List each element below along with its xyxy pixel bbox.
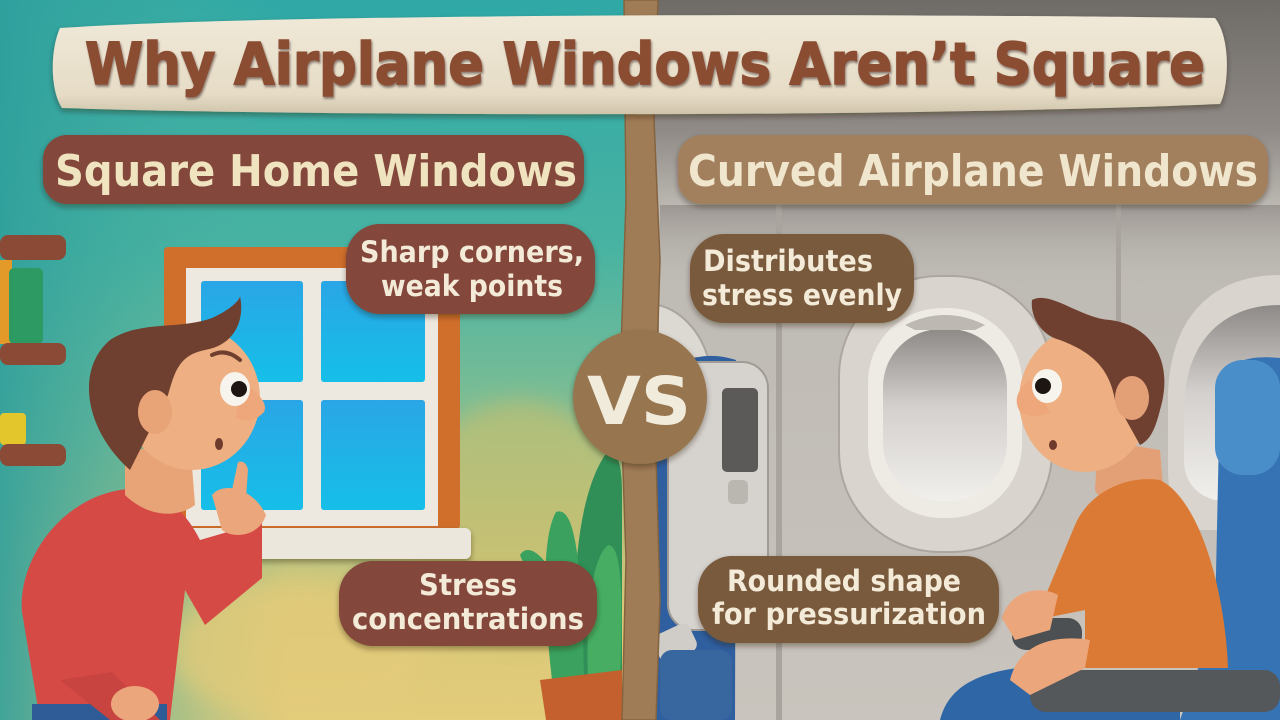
callout: rounded shape: for pressurization [712, 597, 986, 631]
badge: VS [573, 330, 707, 464]
icon: square home window [164, 247, 471, 559]
icon: potted plant [520, 453, 622, 720]
icon: seat back left [651, 356, 768, 720]
icon: airplane window right [1168, 275, 1280, 530]
icon: man right [1002, 298, 1280, 712]
title text: Why Airplane Windows Aren’t Square [85, 30, 1205, 98]
icon: cabin window fragment left [658, 305, 708, 358]
panel: left home wall [0, 0, 640, 720]
heading: square home windows: Square Home Windows [55, 146, 577, 197]
icon: bookshelf [0, 235, 66, 466]
panel: right cabin wall [640, 0, 1280, 720]
callout: distributes stress: stress evenly [702, 278, 902, 312]
callout: sharp corners: weak points [381, 269, 563, 303]
callout: stress concentrations: concentrations [352, 602, 584, 636]
callout: sharp corners [346, 224, 595, 314]
icon: airplane window centre [839, 276, 1052, 552]
callout: rounded shape: Rounded shape [727, 564, 961, 598]
divider: centre clay strip [620, 0, 660, 720]
title banner [53, 15, 1227, 114]
callout: distributes stress [690, 234, 914, 323]
icon: man left [22, 296, 266, 720]
callout: stress concentrations [339, 561, 597, 646]
badge: VS: VS [587, 363, 691, 440]
callout: sharp corners: Sharp corners, [360, 235, 584, 269]
callout: distributes stress: Distributes [703, 244, 873, 278]
callout: rounded shape [698, 556, 999, 643]
icon: seat right [940, 357, 1280, 720]
heading: square home windows [43, 135, 584, 204]
callout: stress concentrations: Stress [419, 568, 517, 602]
